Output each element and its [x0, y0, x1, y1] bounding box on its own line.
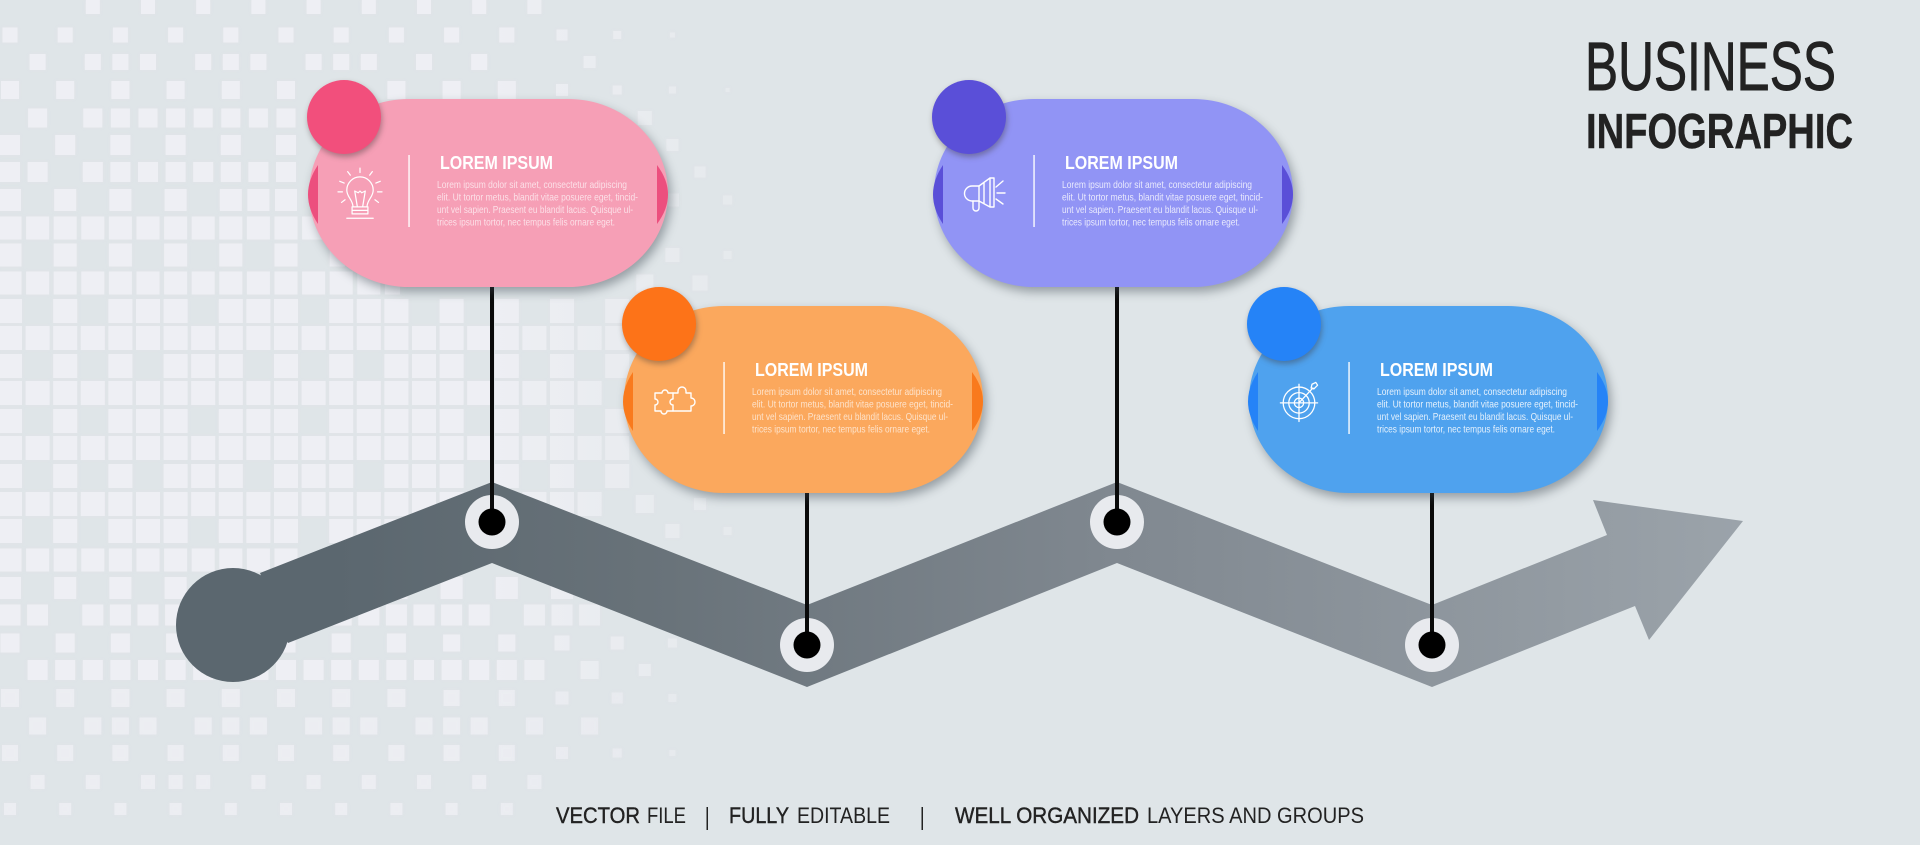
panel: orange puzzle card [622, 287, 983, 493]
text block [1377, 386, 1578, 436]
text block [1062, 179, 1263, 228]
panel: purple megaphone card [932, 80, 1293, 287]
text block: trices ipsum tortor, nec tempus felis ornare eget. [752, 424, 930, 436]
text block: trices ipsum tortor, nec tempus felis ornare eget. [437, 216, 615, 228]
text block: unt vel sapien. Praesent eu blandit lacus. Quisque ul- [752, 411, 948, 423]
text block: trices ipsum tortor, nec tempus felis ornare eget. [1062, 216, 1240, 228]
text block: Lorem ipsum dolor sit amet, consectetur adipiscing [437, 179, 627, 191]
icon: target [1280, 382, 1318, 421]
text block: unt vel sapien. Praesent eu blandit lacus. Quisque ul- [1062, 204, 1258, 216]
connector: step 1 [465, 285, 519, 549]
text block [752, 386, 953, 436]
connector: step 4 [1405, 490, 1459, 672]
heading: LOREM IPSUM [755, 360, 868, 380]
footer tagline: FILE [647, 803, 686, 828]
heading: LOREM IPSUM [1380, 360, 1493, 380]
connector: step 3 [1090, 285, 1144, 549]
heading: LOREM IPSUM [1065, 153, 1178, 173]
footer tagline: VECTOR [556, 803, 640, 828]
footer tagline: WELL ORGANIZED [955, 803, 1139, 828]
footer tagline: EDITABLE [797, 803, 890, 828]
text block: elit. Ut tortor metus, blandit vitae posuere eget, tincid- [1377, 398, 1578, 410]
text block: Lorem ipsum dolor sit amet, consectetur adipiscing [1062, 179, 1252, 191]
heading: LOREM IPSUM [440, 153, 553, 173]
icon: puzzle pieces [655, 387, 695, 414]
text block: trices ipsum tortor, nec tempus felis ornare eget. [1377, 424, 1555, 436]
footer tagline: LAYERS AND GROUPS [1147, 803, 1364, 828]
title: INFOGRAPHIC [1586, 105, 1853, 159]
text block: unt vel sapien. Praesent eu blandit lacus. Quisque ul- [1377, 411, 1573, 423]
connector: step 2 [780, 490, 834, 672]
text block: unt vel sapien. Praesent eu blandit lacus. Quisque ul- [437, 204, 633, 216]
icon: megaphone [964, 178, 1005, 211]
text block: elit. Ut tortor metus, blandit vitae posuere eget, tincid- [437, 192, 638, 204]
panel: blue target card [1247, 287, 1608, 493]
arrow: zigzag growth path [176, 482, 1743, 687]
panel: pink idea card [307, 80, 668, 287]
text block: Lorem ipsum dolor sit amet, consectetur adipiscing [752, 386, 942, 398]
footer tagline: FULLY [729, 803, 789, 828]
footer tagline [556, 803, 1364, 830]
background pattern: pixel squares [0, 7, 732, 809]
text block: elit. Ut tortor metus, blandit vitae posuere eget, tincid- [752, 398, 953, 410]
icon: light bulb [338, 168, 382, 218]
text block [437, 179, 638, 228]
text block: Lorem ipsum dolor sit amet, consectetur adipiscing [1377, 386, 1567, 398]
title [1585, 28, 1853, 159]
text block: elit. Ut tortor metus, blandit vitae posuere eget, tincid- [1062, 192, 1263, 204]
